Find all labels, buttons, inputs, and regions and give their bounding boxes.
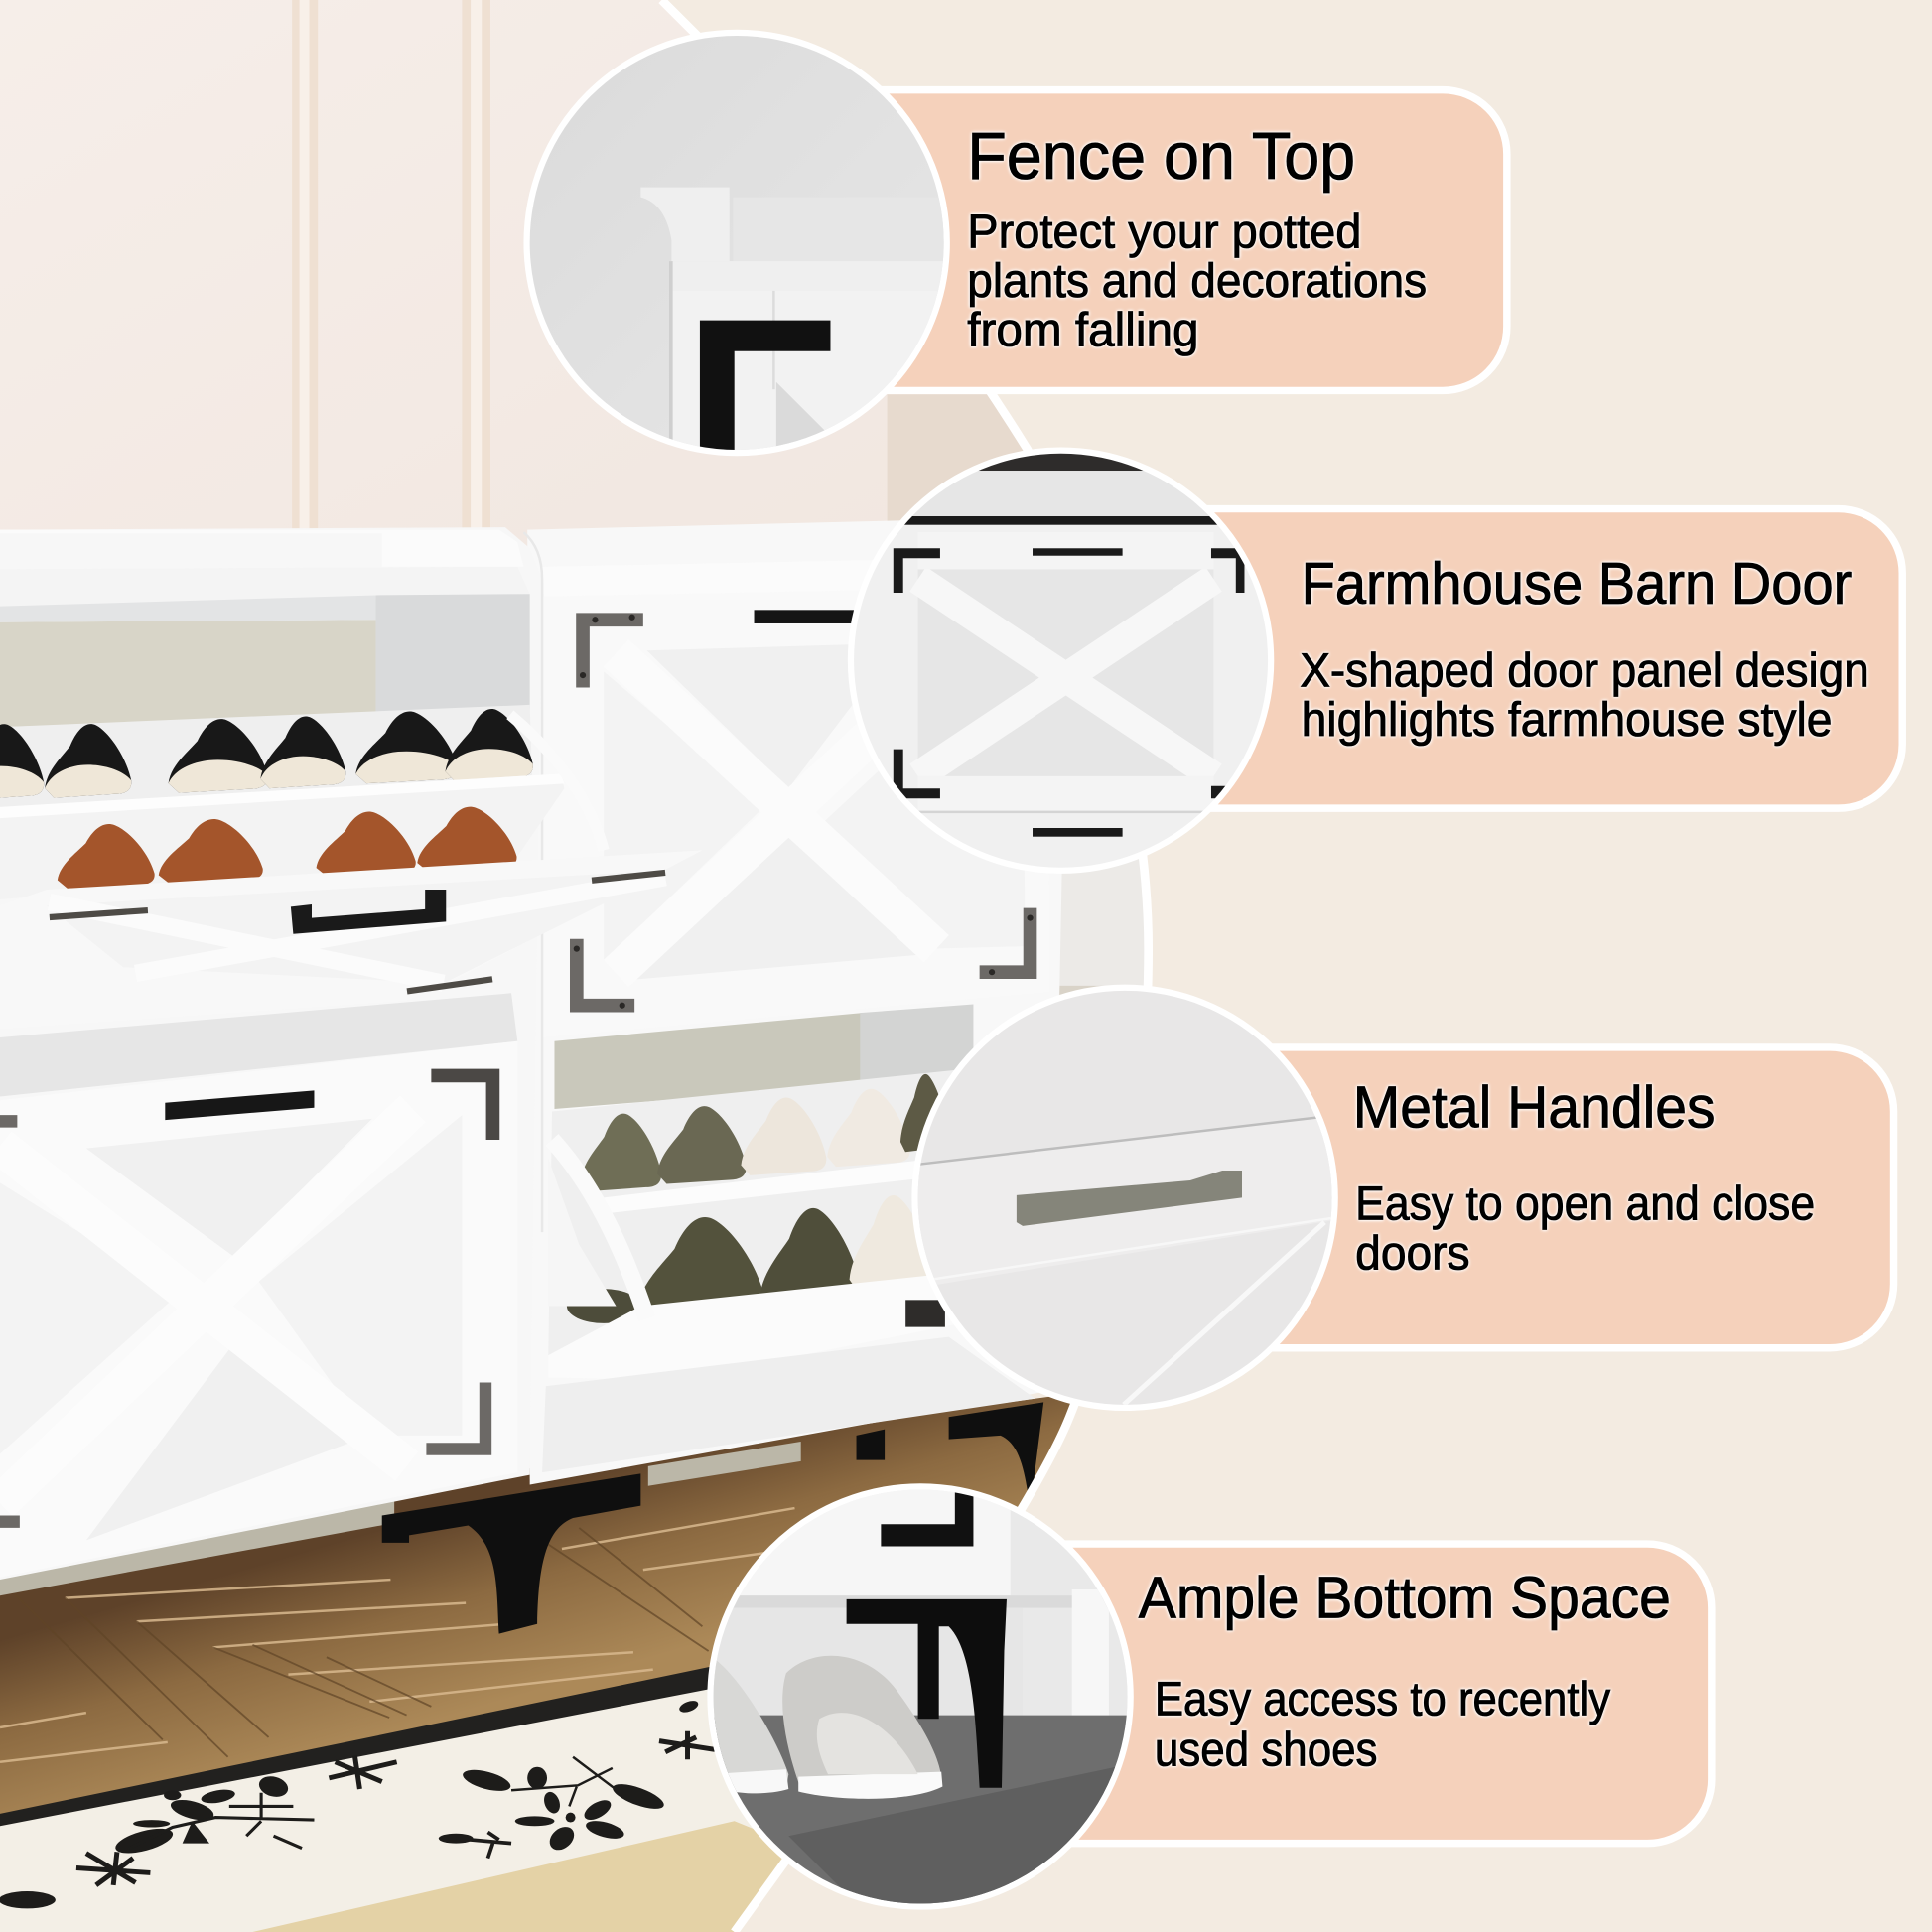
wall with moulding [292,0,1023,528]
panel: Fence on Top [517,25,1507,469]
brown shoes [58,807,517,889]
open shoe bay [554,1013,863,1109]
panel: Farmhouse Barn Door [844,444,1902,881]
description: plants and decorations [967,254,1427,308]
lower shoe compartment [453,775,543,822]
heading: Farmhouse Barn Door [1302,550,1852,617]
hinges on lower door [431,1075,492,1140]
cabinet legs [382,1402,1043,1634]
upper door with X brace [542,587,1049,1037]
description: Easy access to recently [1155,1673,1611,1726]
description: X-shaped door panel design [1300,643,1869,697]
label card [1059,509,1902,808]
lower open flap [549,1276,937,1355]
flap support arc [506,711,544,755]
label card [740,90,1507,390]
rug [0,1666,863,1932]
under-cabinet shadow strip [0,1501,394,1595]
description: from falling [967,304,1199,357]
fence on top [0,530,523,567]
label card [1128,1047,1894,1348]
black sneakers [0,709,533,800]
bottom open shelf [542,1337,1035,1472]
rug floral pattern [0,1699,715,1908]
magnifier: leg clearance detail [702,1478,1140,1910]
right cabinet [527,517,1062,1484]
wood floor [0,1396,1070,1814]
magnifier: X door detail [844,444,1282,881]
description [1155,1673,1611,1776]
open flap door [50,860,665,995]
description: doors [1355,1226,1470,1280]
description [1355,1177,1815,1280]
open bay back wall [0,620,376,727]
left cabinet [0,527,702,1580]
product photo: shoe cabinets [0,0,1171,1932]
description [967,205,1427,357]
olive and cream shoes [567,1074,948,1323]
door hinges [577,620,1031,1006]
upper shoe shelf [11,705,530,727]
heading: Ample Bottom Space [1139,1565,1671,1631]
middle open bay [0,993,517,1097]
panel: Metal Handles [909,982,1894,1414]
magnifier: fence detail [517,25,961,469]
lower door handle [165,1090,314,1120]
heading: Fence on Top [967,119,1355,194]
lower door with X brace [0,1041,517,1578]
photo boundary stroke [661,0,1149,1932]
description [1300,643,1869,747]
description: highlights farmhouse style [1302,693,1832,747]
magnifier: handle detail [909,982,1340,1414]
description: Easy to open and close [1355,1177,1815,1231]
door handle [755,610,859,623]
label card [924,1544,1712,1844]
heading: Metal Handles [1353,1074,1716,1141]
panel: Ample Bottom Space [702,1478,1712,1910]
description: used shoes [1155,1723,1378,1776]
description: Protect your potted [967,205,1361,258]
curtain beside cabinet [1047,850,1159,998]
